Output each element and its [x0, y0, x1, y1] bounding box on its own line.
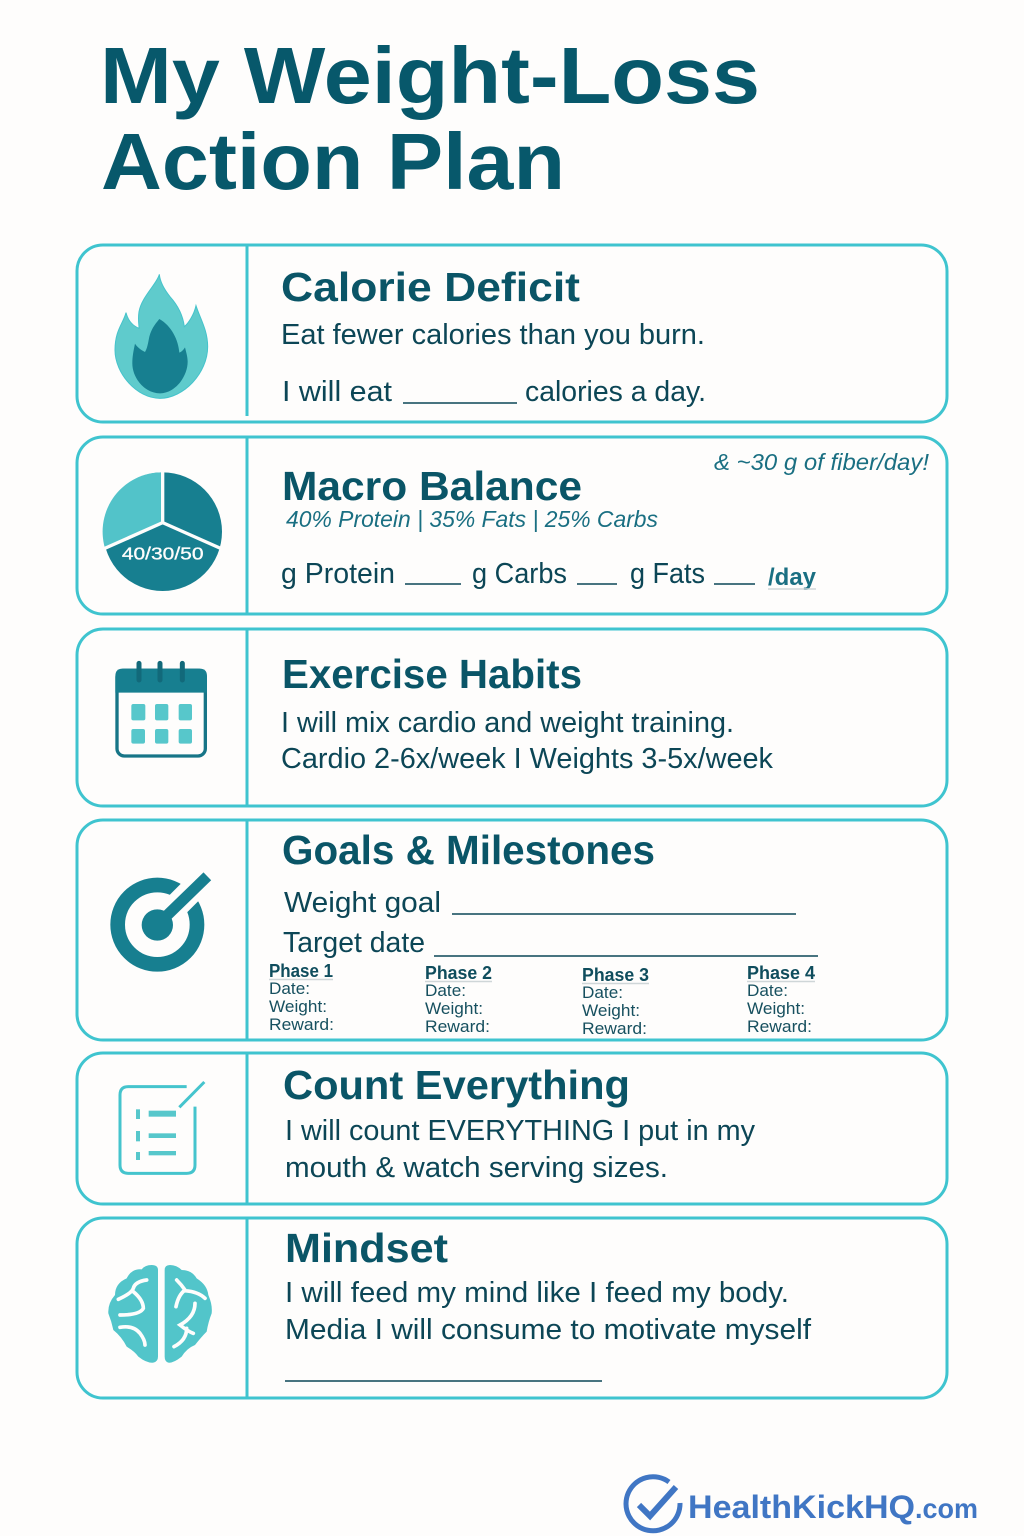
- text: macro grams: g Carbs: [472, 558, 567, 590]
- text: phase 2: Phase 2: [425, 963, 492, 983]
- logo: HealthKickHQ.com: HealthKickHQ: [688, 1489, 915, 1525]
- text: phase 4: Phase 4: [747, 963, 815, 983]
- text: phase 1: Weight:: [269, 997, 327, 1016]
- callout: fiber: & ~30 g of fiber/day!: [714, 449, 930, 475]
- panel: calorie deficit: [77, 245, 947, 422]
- heading: count everything: Count Everything: [283, 1062, 630, 1108]
- text: macro grams: g Protein: [281, 558, 395, 590]
- text: exercise plan: I will mix cardio and weight training.: [281, 707, 734, 739]
- text: phase 3: Weight:: [582, 1001, 640, 1020]
- text: target date: Target date: [283, 927, 425, 959]
- icon: target: [118, 865, 217, 964]
- heading: mindset: Mindset: [285, 1225, 448, 1271]
- title: [100, 31, 760, 206]
- title: My Weight-Loss: [100, 31, 760, 120]
- panel: count everything: [77, 1053, 947, 1204]
- heading: exercise habits: Exercise Habits: [282, 651, 582, 697]
- text: phase 4: Reward:: [747, 1017, 812, 1036]
- text: mindset commitment: Media I will consume to motivate myself: [285, 1314, 812, 1346]
- text: calorie commitment: calories a day.: [525, 376, 706, 408]
- text: phase 1: Phase 1: [269, 961, 333, 981]
- text: phase 3: Date:: [582, 983, 623, 1002]
- text: mindset commitment: I will feed my mind like I feed my body.: [285, 1277, 789, 1309]
- text: count commitment: I will count EVERYTHING I put in my: [285, 1115, 755, 1147]
- text: phase 3: Reward:: [582, 1019, 647, 1038]
- text: weight goal: Weight goal: [284, 887, 441, 919]
- text: phase 3: Phase 3: [582, 965, 649, 985]
- icon: calendar: [115, 663, 207, 756]
- text: macro grams: [281, 558, 817, 591]
- text: exercise plan: [281, 707, 773, 775]
- text: calorie commitment: [282, 376, 706, 408]
- text: phase 1: Reward:: [269, 1015, 334, 1034]
- logo: HealthKickHQ.com: .com: [915, 1493, 978, 1524]
- text: mindset commitment: [285, 1277, 812, 1381]
- text: macro grams: g Fats: [630, 558, 705, 590]
- text: calorie commitment: I will eat: [282, 376, 392, 408]
- text: macro percentages: 40% Protein | 35% Fats | 25% Carbs: [286, 506, 658, 532]
- text: phase 2: Date:: [425, 981, 466, 1000]
- text: phase 2: Weight:: [425, 999, 483, 1018]
- text: phase 4: Weight:: [747, 999, 805, 1018]
- text: phase 3: [582, 965, 649, 1038]
- text: eat fewer calories: Eat fewer calories than you burn.: [281, 319, 705, 351]
- icon: macro pie chart: [103, 472, 222, 591]
- text: phase 4: Date:: [747, 981, 788, 1000]
- icon: checklist: [120, 1082, 204, 1173]
- text: count commitment: [285, 1115, 755, 1184]
- panel: mindset: [77, 1218, 947, 1398]
- text: count commitment: mouth & watch serving sizes.: [285, 1152, 668, 1184]
- heading: macro balance: Macro Balance: [282, 463, 582, 509]
- title: Action Plan: [101, 117, 565, 206]
- text: phase 2: [425, 963, 492, 1036]
- panel: goals and milestones: [77, 820, 947, 1040]
- text: exercise plan: Cardio 2-6x/week I Weights 3-5x/week: [281, 743, 773, 775]
- text: phase 4: [747, 963, 815, 1036]
- heading: goals and milestones: Goals & Milestones: [282, 827, 655, 873]
- icon: flame: [115, 274, 208, 398]
- text: macro grams: /day: [768, 564, 817, 591]
- text: phase 2: Reward:: [425, 1017, 490, 1036]
- icon: macro pie chart: 40/30/50: [122, 543, 203, 563]
- panel: macro balance: [77, 437, 947, 614]
- panel: exercise habits: [77, 629, 947, 806]
- text: phase 1: Date:: [269, 979, 310, 998]
- text: phase 1: [269, 961, 334, 1034]
- logo: HealthKickHQ.com: [626, 1477, 978, 1531]
- icon: brain: [108, 1265, 212, 1363]
- icon: check badge: [626, 1477, 680, 1531]
- heading: calorie deficit: Calorie Deficit: [281, 264, 580, 310]
